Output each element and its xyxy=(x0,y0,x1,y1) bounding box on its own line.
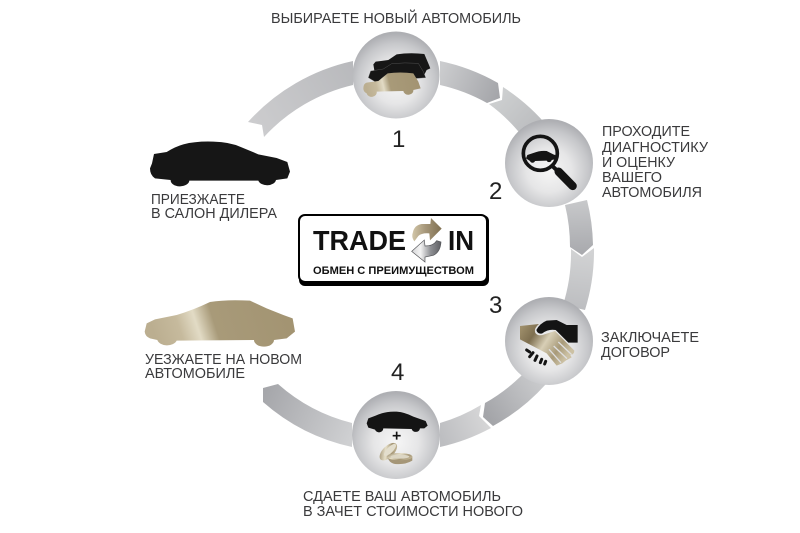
text: step 4: В ЗАЧЕТ СТОИМОСТИ НОВОГО xyxy=(303,504,523,520)
step 2 circle xyxy=(505,119,593,207)
logo: trade-in: IN xyxy=(448,225,474,256)
step numbers: 2 xyxy=(489,178,502,205)
text: step 2 xyxy=(602,124,709,201)
text: arrive: ПРИЕЗЖАЕТЕ xyxy=(151,192,245,208)
icon: car plus coins xyxy=(367,412,428,464)
step 1 circle xyxy=(352,32,440,118)
step numbers xyxy=(391,126,502,386)
text: step 4: СДАЕТЕ ВАШ АВТОМОБИЛЬ xyxy=(303,489,501,505)
icon: exchange arrows xyxy=(412,218,442,262)
heading: step 1: ВЫБИРАЕТЕ НОВЫЙ АВТОМОБИЛЬ xyxy=(271,9,521,27)
logo: trade-in: TRADE xyxy=(313,225,406,256)
logo: trade-in xyxy=(299,215,489,286)
cycle ring arrows xyxy=(248,61,594,447)
step 3 circle xyxy=(505,297,593,385)
icon: handshake xyxy=(520,320,578,366)
text: leave: УЕЗЖАЕТЕ НА НОВОМ xyxy=(145,352,302,368)
black car: arrive xyxy=(150,142,290,186)
text: step 2: ДИАГНОСТИКУ xyxy=(602,140,709,156)
text: leave xyxy=(145,352,302,382)
text: step 2: ПРОХОДИТЕ xyxy=(602,124,690,140)
icon: three cars xyxy=(363,53,430,97)
text: arrive xyxy=(151,192,277,222)
step numbers: 3 xyxy=(489,292,502,319)
step numbers: 4 xyxy=(391,359,404,386)
step 4 circle xyxy=(352,391,440,479)
text: step 2: АВТОМОБИЛЯ xyxy=(602,185,702,201)
text: step 2: ВАШЕГО xyxy=(602,170,662,186)
text: step 4 xyxy=(303,489,523,520)
logo: trade-in: ОБМЕН С ПРЕИМУЩЕСТВОМ xyxy=(313,265,474,277)
text: step 3 xyxy=(601,330,699,361)
text: step 3: ДОГОВОР xyxy=(601,345,670,361)
text: arrive: В САЛОН ДИЛЕРА xyxy=(151,206,277,222)
text: step 3: ЗАКЛЮЧАЕТЕ xyxy=(601,330,699,346)
gold car: leave xyxy=(145,300,295,347)
icon: magnifier with car xyxy=(523,136,573,186)
text: step 2: И ОЦЕНКУ xyxy=(602,155,676,171)
step numbers: 1 xyxy=(392,126,405,153)
text: leave: АВТОМОБИЛЕ xyxy=(145,366,245,382)
